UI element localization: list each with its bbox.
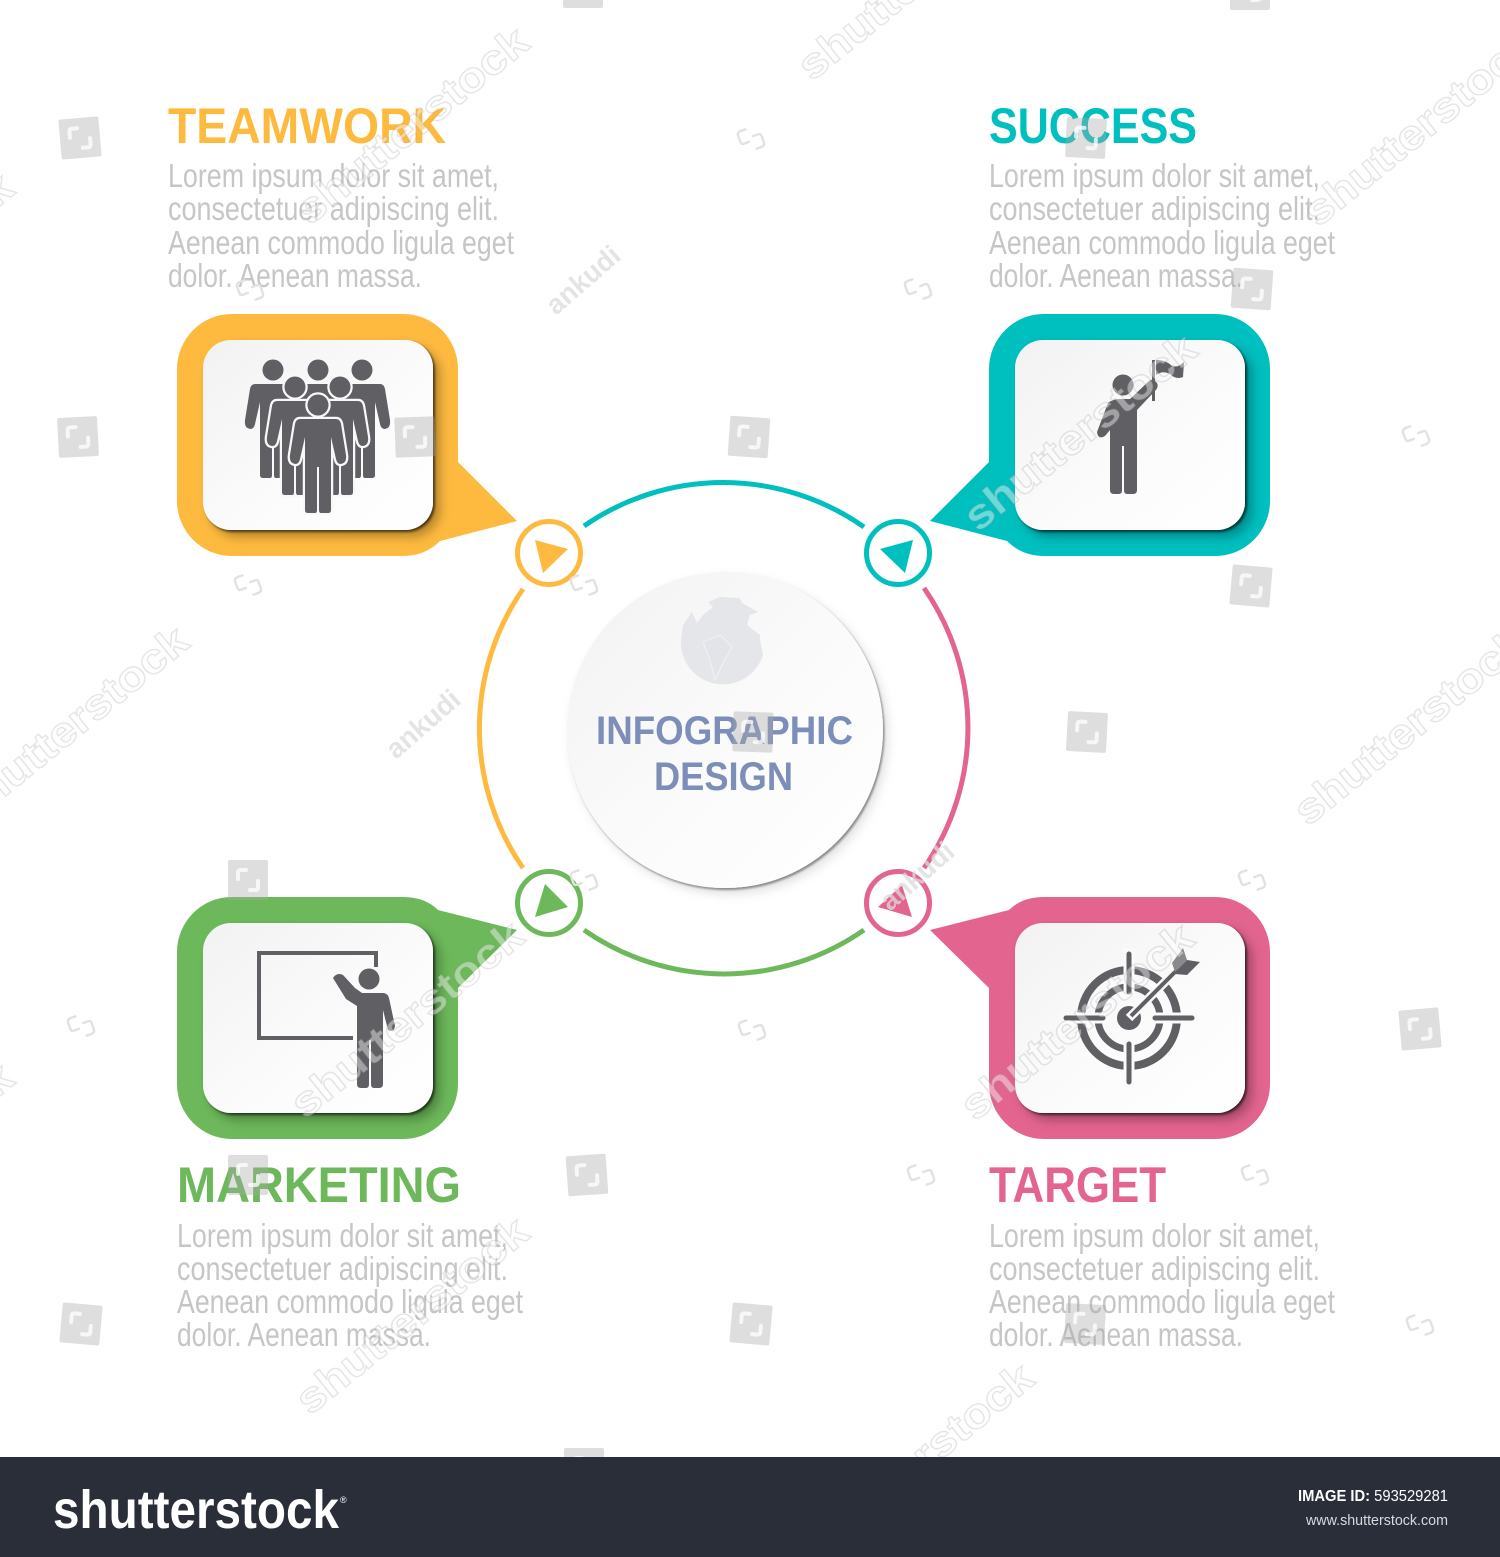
panel: success — [930, 98, 1335, 556]
node: success marker — [866, 522, 930, 584]
text block: teamwork: Lorem ipsum dolor sit amet, — [168, 157, 499, 194]
heading: target: TARGET — [989, 1157, 1166, 1213]
center title: DESIGN — [654, 755, 793, 799]
text block: marketing: dolor. Aenean massa. — [177, 1316, 431, 1353]
registered mark: ® — [340, 1495, 347, 1505]
icon: team of people — [245, 360, 390, 513]
card: teamwork — [203, 340, 433, 530]
website: www.shutterstock.com — [1305, 1512, 1448, 1529]
text block: teamwork: dolor. Aenean massa. — [168, 257, 422, 294]
watermark overlay: shutterstock — [951, 913, 1203, 1129]
text block: marketing: Lorem ipsum dolor sit amet, — [177, 1217, 508, 1254]
icon: globe — [681, 597, 763, 684]
text block: target: Aenean commodo ligula eget — [989, 1283, 1335, 1320]
text block: marketing — [177, 1217, 523, 1353]
panel: teamwork — [168, 98, 517, 556]
watermark overlay: shutterstock — [286, 1207, 538, 1423]
text block: target: consectetuer adipiscing elit. — [989, 1250, 1320, 1287]
text block: success: Aenean commodo ligula eget — [989, 224, 1335, 261]
center title — [596, 709, 853, 799]
watermark overlay: ankudi — [874, 835, 960, 917]
image id: IMAGE ID: 593529281 — [1298, 1488, 1448, 1505]
node: marketing marker — [518, 872, 580, 934]
footer logo: shutterstock — [53, 1480, 340, 1540]
node: teamwork marker — [518, 522, 580, 584]
watermark overlay: ankudi — [540, 239, 626, 321]
panel: target — [930, 897, 1335, 1353]
card: target — [1015, 923, 1245, 1113]
callout bubble: success — [930, 314, 1270, 556]
footer bar — [0, 1457, 1500, 1557]
text block: marketing: Aenean commodo ligula eget — [177, 1283, 523, 1320]
node: target marker — [866, 872, 930, 934]
heading: success: SUCCESS — [989, 98, 1197, 154]
ring: connecting arcs — [479, 483, 968, 974]
text block: success: consectetuer adipiscing elit. — [989, 190, 1320, 227]
heading: marketing: MARKETING — [177, 1157, 461, 1213]
watermark overlay: ankudi — [380, 683, 466, 765]
text block: teamwork: Aenean commodo ligula eget — [168, 224, 514, 261]
heading: teamwork: TEAMWORK — [168, 98, 446, 154]
text block: success: Lorem ipsum dolor sit amet, — [989, 157, 1320, 194]
text block: teamwork: consectetuer adipiscing elit. — [168, 190, 499, 227]
watermark overlay: shutterstock — [286, 17, 538, 233]
text block: target: Lorem ipsum dolor sit amet, — [989, 1217, 1320, 1254]
text block: teamwork — [168, 157, 514, 294]
card: success — [1015, 340, 1245, 530]
callout bubble: marketing — [177, 897, 517, 1139]
watermark overlay: shutterstock — [281, 911, 533, 1127]
icon: presenter at board — [259, 953, 395, 1088]
text block: marketing: consectetuer adipiscing elit. — [177, 1250, 508, 1287]
text block: target — [989, 1217, 1335, 1353]
icon: person with flag — [1097, 360, 1184, 494]
text block: success: dolor. Aenean massa. — [989, 257, 1243, 294]
callout bubble: target — [930, 897, 1270, 1139]
text block: success — [989, 157, 1335, 294]
panel: marketing — [177, 897, 523, 1353]
center circle — [567, 572, 883, 888]
text block: target: dolor. Aenean massa. — [989, 1316, 1243, 1353]
callout bubble: teamwork — [177, 314, 517, 556]
icon: target with arrow — [1060, 948, 1200, 1088]
center title: INFOGRAPHIC — [596, 709, 853, 753]
watermark overlay: shutterstock — [954, 324, 1206, 540]
card: marketing — [203, 923, 433, 1113]
